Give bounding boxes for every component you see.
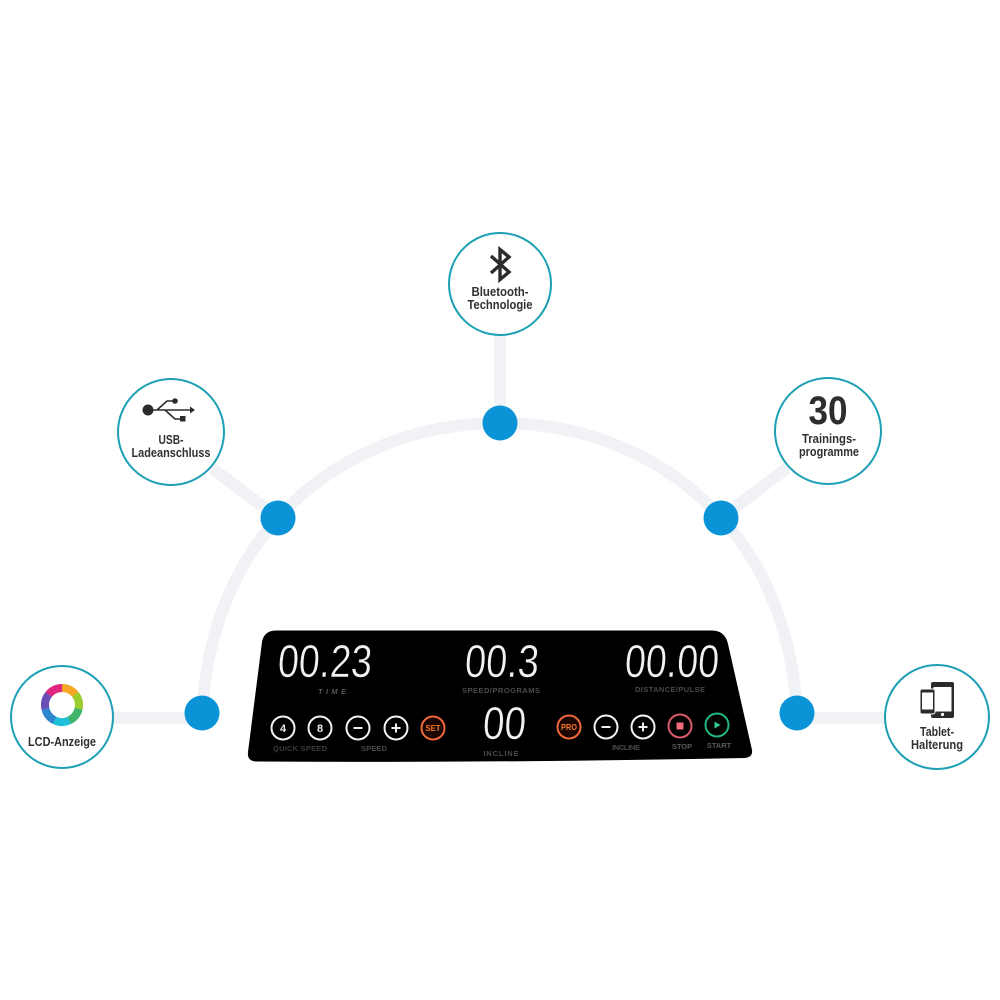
feature: LCD-Anzeige [11, 666, 113, 768]
speed buttons [346, 716, 408, 753]
start button [706, 714, 732, 750]
quick speed buttons: QUICK SPEED [273, 744, 328, 753]
feature: USB-Ladeanschluss: USB- [158, 433, 184, 447]
pro button [558, 716, 580, 738]
display: distance/pulse: DISTANCE/PULSE [635, 685, 705, 694]
speed buttons: SPEED [361, 744, 388, 753]
start button: START [707, 741, 732, 750]
incline buttons: INCLINE [612, 743, 640, 752]
control panel [248, 630, 752, 762]
feature: LCD-Anzeige: LCD-Anzeige [28, 735, 96, 749]
number 30: 30 [808, 389, 848, 433]
feature: 30 Trainingsprogramme [775, 378, 881, 484]
feature: Bluetooth-Technologie [449, 233, 551, 335]
icon: tablet and phone [920, 682, 954, 718]
display: speed/programs: 00.3 [463, 635, 541, 687]
incline buttons [594, 716, 654, 752]
quick speed buttons: 8 [317, 723, 323, 735]
feature: USB-Ladeanschluss: Ladeanschluss [132, 446, 211, 460]
feature: Tablet-Halterung: Halterung [911, 738, 963, 752]
quick speed buttons [272, 716, 332, 753]
display: incline: 00 [481, 697, 528, 749]
display: incline: INCLINE [484, 749, 518, 758]
stop button [668, 714, 692, 751]
set button [422, 716, 444, 740]
stop button: STOP [672, 742, 692, 751]
set button: SET [426, 723, 441, 733]
icon: colour wheel [38, 681, 86, 729]
display: time: TIME [318, 687, 347, 696]
feature: USB-Ladeanschluss [118, 379, 224, 485]
feature: Bluetooth-Technologie: Bluetooth- [472, 285, 528, 299]
feature: Bluetooth-Technologie: Technologie [468, 298, 533, 312]
feature: 30 Trainingsprogramme: programme [799, 445, 859, 459]
node dots [184, 406, 814, 730]
icon: Bluetooth symbol [491, 250, 509, 280]
pro button: PRO [561, 722, 577, 732]
icon: USB symbol [142, 398, 195, 422]
display: speed/programs: SPEED/PROGRAMS [462, 686, 540, 695]
feature: Tablet-Halterung [885, 665, 989, 769]
feature: Tablet-Halterung: Tablet- [920, 725, 954, 739]
display: distance/pulse: 00.00 [623, 635, 721, 687]
connector arc and spokes [112, 330, 888, 718]
feature: 30 Trainingsprogramme: Trainings- [802, 432, 856, 446]
display: time: 00.23 [276, 635, 374, 687]
quick speed buttons: 4 [280, 723, 287, 735]
